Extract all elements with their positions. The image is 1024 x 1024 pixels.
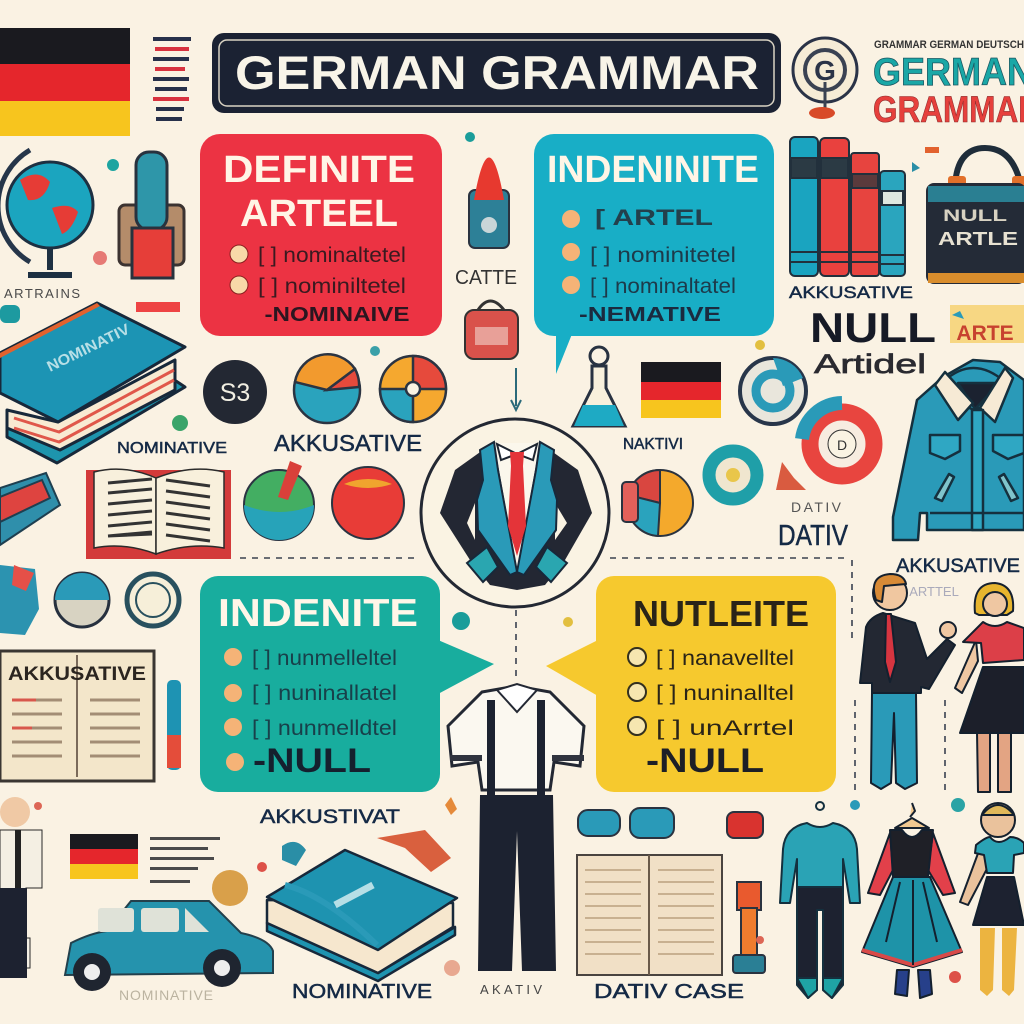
arrow: down dash xyxy=(511,368,521,410)
label: dativ case: DATIV CASE xyxy=(594,981,744,1003)
panel: definite artikel: ARTEEL xyxy=(240,193,398,235)
icon: globe xyxy=(0,150,93,275)
heading: null artikel: Artidel xyxy=(814,349,926,379)
icon: car xyxy=(65,901,273,991)
panel: indefinite bottom: INDENITE xyxy=(218,592,418,635)
icon: null artikel bag xyxy=(926,148,1024,284)
label: dativ: DATIV xyxy=(791,499,842,515)
icon: bottle machine xyxy=(119,152,184,278)
chart: donut D xyxy=(802,403,874,476)
heading: null artikel: NULL xyxy=(810,304,936,351)
icon: null artikel bag: ARTLE xyxy=(938,229,1018,249)
icon: null artikel bag: NULL xyxy=(943,206,1007,225)
icon: woman bottom right xyxy=(960,803,1024,996)
icon: dress on hanger xyxy=(862,803,962,998)
label: nominative bottom: NOMINATIVE xyxy=(292,981,432,1003)
label: small top left caption: ARTRAINS xyxy=(4,286,80,301)
chart: colour pie xyxy=(622,470,693,536)
panel: nutlite bottom: [ ] nuninalltel xyxy=(656,682,794,705)
label: akkusative right xyxy=(896,556,1020,599)
panel: nutlite bottom: -NULL xyxy=(646,742,764,780)
tag: artel: ARTE xyxy=(956,322,1014,345)
chart: donut D: D xyxy=(837,437,847,453)
icon: left clutter blue object xyxy=(0,473,60,545)
icon: open book xyxy=(86,469,231,559)
label: catte: CATTE xyxy=(455,267,517,289)
panel: definite artikel: DEFINITE xyxy=(223,149,415,191)
icon: small lozenges xyxy=(578,808,763,838)
central emblem: suit in circle xyxy=(421,419,609,607)
label: akkusative top right: AKKUSATIVE xyxy=(789,283,913,302)
flag: bottom left Germany xyxy=(70,834,138,879)
icon: bottom teal book xyxy=(267,850,457,981)
icon: bottom open book xyxy=(577,855,722,975)
panel: nutlite bottom: NUTLEITE xyxy=(633,593,809,634)
label: akkusative: AKKUSATIVE xyxy=(274,430,422,456)
chart: pie one xyxy=(294,354,360,423)
label: nominative: NOMINATIVE xyxy=(117,440,227,457)
icon: man bottom left xyxy=(0,797,42,978)
icon: large teal book: NOMINATIV xyxy=(44,321,133,376)
panel: definite artikel: -NOMINAIVE xyxy=(264,304,410,326)
dashed connector lines xyxy=(240,558,945,790)
flag: top left Germany xyxy=(0,28,130,136)
title banner xyxy=(212,33,781,113)
chart: green ball xyxy=(244,461,314,540)
panel: indefinite bottom: [ ] nuninallatel xyxy=(252,682,397,705)
panel: nutlite bottom: [ ] unArrtel xyxy=(656,717,794,740)
badge: s3: S3 xyxy=(220,379,250,407)
label: dativ xyxy=(776,462,849,552)
icon: red backpack xyxy=(465,301,518,359)
label: akativ: AKATIV xyxy=(480,982,542,997)
panel: definite artikel: [ ] nominiltetel xyxy=(258,275,406,298)
panel: indefinite artikel: [ ] nominaltatel xyxy=(590,275,736,298)
small logo text xyxy=(873,39,1024,130)
label: dativ: DATIV xyxy=(778,520,849,552)
chart: teal ring xyxy=(709,451,757,499)
tag: artel xyxy=(950,305,1024,345)
icon: circular G emblem: G xyxy=(814,55,836,86)
panel: indefinite artikel: [ ARTEL xyxy=(595,205,713,230)
label: akkusative right: AKKUSATIVE xyxy=(896,556,1020,577)
icon: woman in skirt xyxy=(955,583,1024,792)
panel: indefinite bottom xyxy=(200,576,494,792)
icon: red pencil figure xyxy=(469,158,509,248)
panel: indefinite bottom: [ ] nunmelleltel xyxy=(252,647,397,670)
panel: nutlite bottom xyxy=(546,576,836,792)
panel: definite artikel xyxy=(200,134,442,336)
panel: nutlite bottom: [ ] nanavelltel xyxy=(656,647,794,670)
icon: akkusative book: AKKUSATIVE xyxy=(8,664,146,685)
chart: ring gauge xyxy=(740,358,806,424)
icon: teal circle xyxy=(55,573,109,627)
icon: large teal book xyxy=(0,303,185,463)
flag: centre Germany xyxy=(641,362,721,418)
icon: stack of upright books xyxy=(790,137,905,276)
icon: circular G emblem xyxy=(793,38,857,119)
panel: indefinite bottom: [ ] nunmelldtel xyxy=(252,717,397,740)
icon: man in suit xyxy=(860,574,956,789)
icon: shirt with suspenders and trousers xyxy=(448,684,584,971)
icon: ring xyxy=(127,574,179,626)
icon: striped lines xyxy=(153,37,191,121)
panel: indefinite bottom: -NULL xyxy=(253,742,371,780)
icon: small item row left xyxy=(0,565,39,635)
title banner: GERMAN GRAMMAR xyxy=(235,46,759,99)
decorative dots xyxy=(34,132,965,983)
panel: indefinite artikel: [ ] nominitetel xyxy=(590,244,736,267)
chart: red heart ball xyxy=(332,467,404,539)
chart: pie two xyxy=(380,356,446,422)
icon: akkusative book xyxy=(0,651,154,781)
label: akkustivat: AKKUSTIVAT xyxy=(260,807,400,828)
icon: man teal sweater on hanger xyxy=(780,802,860,998)
icon: pencil xyxy=(167,680,181,770)
label: naktivi: NAKTIVI xyxy=(623,436,683,453)
icon: teal jacket xyxy=(893,360,1024,540)
label: akkusative right: ARTTEL xyxy=(909,584,959,599)
text: faint notes xyxy=(150,837,248,906)
panel: definite artikel: [ ] nominaltetel xyxy=(258,244,406,267)
icon: lamp bottle xyxy=(733,882,765,973)
panel: indefinite artikel xyxy=(534,134,774,374)
panel: indefinite artikel: -NEMATIVE xyxy=(579,304,721,326)
label: small top left caption xyxy=(0,159,180,323)
label: faint nominative: NOMINATIVE xyxy=(119,987,213,1003)
icon: clutter above bottom book xyxy=(257,797,457,872)
panel: indefinite artikel: INDENINITE xyxy=(547,149,759,191)
badge: s3 xyxy=(203,360,267,424)
heading: null artikel xyxy=(810,304,936,379)
icon: flask xyxy=(573,347,625,426)
